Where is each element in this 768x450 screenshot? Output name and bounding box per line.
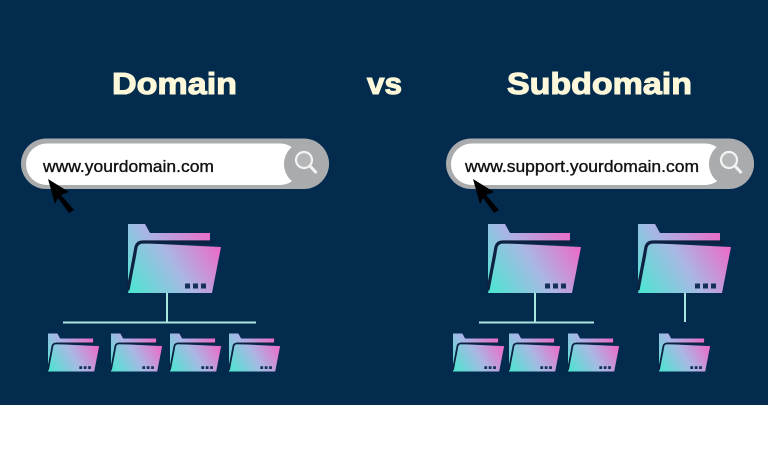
connector lines: [63, 293, 256, 322]
icon: cursor arrow, domain: [48, 179, 74, 213]
icon: magnifier: [296, 152, 316, 173]
child folder 1: [453, 334, 504, 371]
parent folder: [128, 224, 221, 293]
child folder 3: [568, 334, 619, 371]
icon: magnifier: [721, 152, 742, 173]
child folder: [659, 334, 710, 371]
tree: subdomain second folder: [638, 224, 731, 371]
child folder 2: [509, 334, 560, 371]
child folder 2: [111, 334, 162, 371]
url text: www.yourdomain.com: [42, 158, 214, 176]
parent folder: [638, 224, 731, 293]
connector line: [684, 293, 686, 322]
connector lines: [479, 293, 594, 322]
tree: subdomain main folders: [453, 224, 619, 371]
child folder 4: [229, 334, 280, 371]
child folder 1: [48, 334, 99, 371]
search bar: domain: [21, 138, 329, 189]
title: vs: vs: [367, 66, 402, 101]
child folder 3: [170, 334, 221, 371]
parent folder: [488, 224, 581, 293]
title: Subdomain: Subdomain: [507, 66, 692, 101]
search bar: subdomain: [446, 138, 754, 189]
icon: cursor arrow, subdomain: [473, 179, 499, 213]
tree: domain folders: [48, 224, 280, 371]
url text: www.support.yourdomain.com: [464, 158, 699, 176]
title: Domain: Domain: [112, 66, 237, 101]
